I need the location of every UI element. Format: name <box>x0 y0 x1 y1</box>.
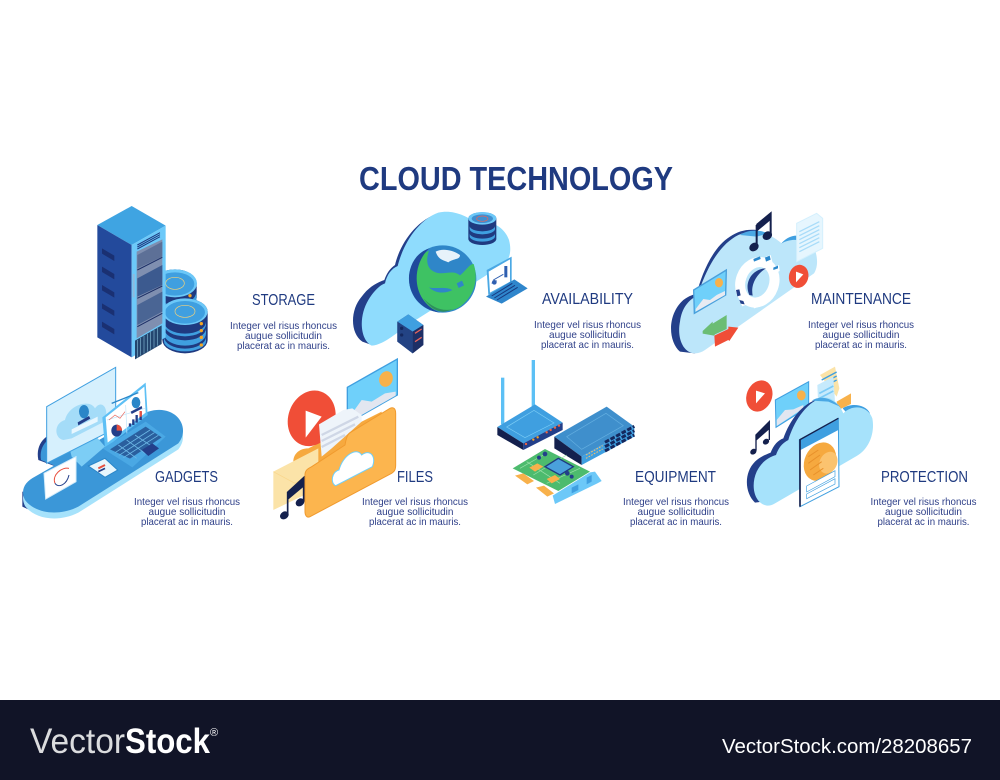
text block: storage <box>230 320 337 352</box>
heading: protection: PROTECTION <box>881 469 968 486</box>
text block: availability: placerat ac in mauris. <box>541 339 634 351</box>
text block: gadgets: Integer vel risus rhoncus <box>134 496 240 508</box>
text block: equipment <box>623 496 729 528</box>
text block: files: Integer vel risus rhoncus <box>362 496 468 508</box>
panel: storage <box>97 206 337 359</box>
logo: VectorStock: ® <box>210 727 218 739</box>
heading: gadgets: GADGETS <box>155 469 218 486</box>
text block: protection: augue sollicitudin <box>885 506 962 518</box>
text block: gadgets: placerat ac in mauris. <box>141 516 233 528</box>
logo: VectorStock: VectorStock <box>30 722 220 761</box>
panel: equipment <box>497 360 729 528</box>
text block: maintenance: augue sollicitudin <box>822 329 900 341</box>
panel: files <box>273 359 468 528</box>
panel: availability <box>353 212 641 353</box>
heading: maintenance: MAINTENANCE <box>811 291 911 308</box>
text block: maintenance <box>808 319 914 351</box>
text block: availability: augue sollicitudin <box>549 329 626 341</box>
text block: storage: augue sollicitudin <box>245 330 322 342</box>
heading: equipment: EQUIPMENT <box>635 469 716 486</box>
text block: files: placerat ac in mauris. <box>369 516 461 528</box>
icon: folder with media files <box>273 359 397 521</box>
heading: availability: AVAILABILITY <box>542 291 633 308</box>
text block: protection: placerat ac in mauris. <box>878 516 970 528</box>
text block: files: augue sollicitudin <box>376 506 454 518</box>
icon: cloud with globe <box>353 212 528 353</box>
text block: maintenance: Integer vel risus rhoncus <box>808 319 914 331</box>
title: CLOUD TECHNOLOGY <box>359 160 673 197</box>
text block: storage: placerat ac in mauris. <box>237 340 330 352</box>
text block: protection <box>870 496 976 528</box>
text block: gadgets: augue sollicitudin <box>148 506 226 518</box>
footer id text: VectorStock.com/28208657 <box>722 736 972 758</box>
text block: equipment: Integer vel risus rhoncus <box>623 496 729 508</box>
panel: gadgets <box>22 367 240 528</box>
heading: storage: STORAGE <box>252 292 315 309</box>
footer bar <box>0 700 1000 780</box>
text block: availability: Integer vel risus rhoncus <box>534 319 641 331</box>
icon: cloud platform with monitor and laptop <box>22 367 183 518</box>
panel: protection <box>742 367 976 528</box>
text block: gadgets <box>134 496 240 528</box>
text block: equipment: augue sollicitudin <box>638 506 715 518</box>
icon: router, switch and circuit board <box>497 360 634 504</box>
text block: protection: Integer vel risus rhoncus <box>870 496 976 508</box>
heading: files: FILES <box>397 469 433 486</box>
icon: server rack with databases <box>97 206 208 359</box>
icon: cloud with phone and safe <box>742 367 873 507</box>
panel: maintenance <box>671 213 914 353</box>
text block: availability <box>534 319 641 351</box>
text block: equipment: placerat ac in mauris. <box>630 516 722 528</box>
text block: storage: Integer vel risus rhoncus <box>230 320 337 332</box>
icon: cloud with gear <box>671 213 823 353</box>
text block: maintenance: placerat ac in mauris. <box>815 339 907 351</box>
text block: files <box>362 496 468 528</box>
